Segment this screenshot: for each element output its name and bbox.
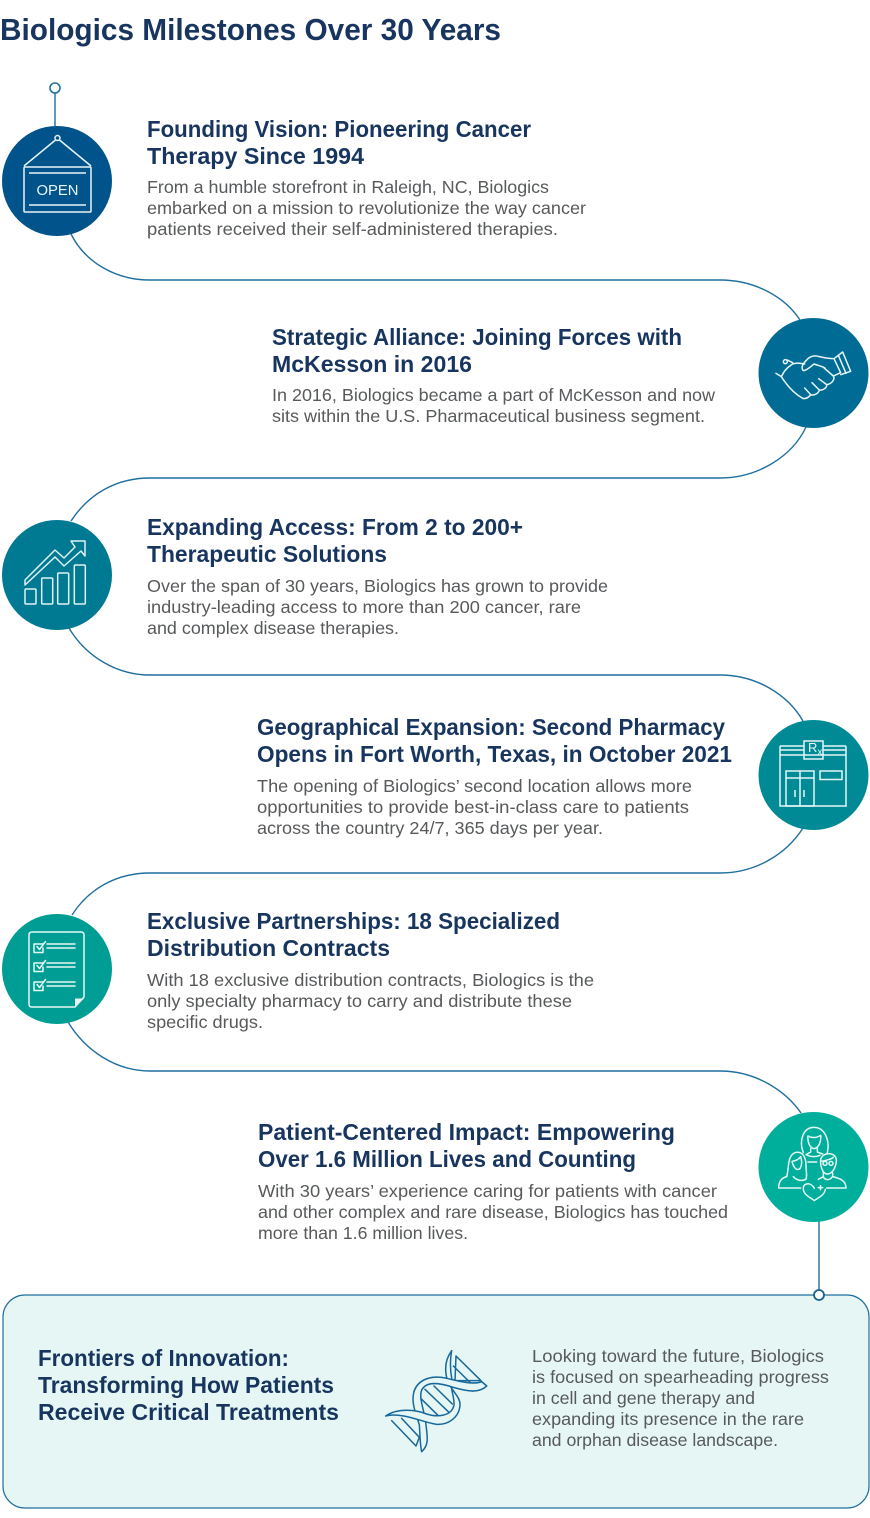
panel heading: Transforming How Patients xyxy=(38,1372,334,1398)
body text: patients received their self-administered therapies. xyxy=(147,219,558,239)
icon: pharmacy storefront: R xyxy=(808,740,817,755)
body text xyxy=(257,776,692,838)
body text: specific drugs. xyxy=(147,1012,263,1032)
body text: more than 1.6 million lives. xyxy=(258,1223,468,1243)
icon: growth chart xyxy=(2,520,112,630)
body text: across the country 24/7, 365 days per year. xyxy=(257,818,603,838)
body text: With 30 years’ experience caring for patients with cancer xyxy=(258,1181,717,1201)
heading xyxy=(147,116,531,169)
heading: Opens in Fort Worth, Texas, in October 2021 xyxy=(257,741,732,767)
heading: Therapy Since 1994 xyxy=(147,143,364,169)
body text: With 18 exclusive distribution contracts, Biologics is the xyxy=(147,970,594,990)
milestone 6: patient-centered impact xyxy=(258,1112,868,1243)
icon: handshake xyxy=(758,318,868,428)
panel heading xyxy=(38,1345,339,1425)
heading xyxy=(258,1119,675,1172)
body text: sits within the U.S. Pharmaceutical business segment. xyxy=(272,406,705,426)
heading: Distribution Contracts xyxy=(147,935,390,961)
heading xyxy=(257,714,732,767)
milestone 5: exclusive partnerships xyxy=(2,908,594,1032)
body text xyxy=(272,385,715,426)
heading: Geographical Expansion: Second Pharmacy xyxy=(257,714,725,740)
heading xyxy=(272,324,682,377)
body text: industry-leading access to more than 200 cancer, rare xyxy=(147,597,581,617)
body text: In 2016, Biologics became a part of McKesson and now xyxy=(272,385,715,405)
panel body text: Looking toward the future, Biologics xyxy=(532,1346,824,1366)
body text: The opening of Biologics’ second location allows more xyxy=(257,776,692,796)
panel: frontiers of innovation xyxy=(3,1290,869,1508)
heading: Strategic Alliance: Joining Forces with xyxy=(272,324,682,350)
body text xyxy=(147,576,608,638)
body text: opportunities to provide best-in-class care to patients xyxy=(257,797,689,817)
icon: pharmacy storefront: x xyxy=(817,747,822,758)
connector path xyxy=(50,83,819,1290)
icon: pharmacy storefront xyxy=(758,720,868,830)
body text: and complex disease therapies. xyxy=(147,618,399,638)
body text: only specialty pharmacy to carry and distribute these xyxy=(147,991,572,1011)
body text xyxy=(147,970,594,1032)
milestone 4: geographical expansion xyxy=(257,714,868,838)
heading xyxy=(147,908,560,961)
heading: Founding Vision: Pioneering Cancer xyxy=(147,116,531,142)
panel body text: expanding its presence in the rare xyxy=(532,1409,804,1429)
heading: Exclusive Partnerships: 18 Specialized xyxy=(147,908,560,934)
body text: embarked on a mission to revolutionize the way cancer xyxy=(147,198,586,218)
icon: patients with heart xyxy=(758,1112,868,1222)
heading: McKesson in 2016 xyxy=(272,351,472,377)
heading: Patient-Centered Impact: Empowering xyxy=(258,1119,675,1145)
body text: Over the span of 30 years, Biologics has grown to provide xyxy=(147,576,608,596)
panel body text: in cell and gene therapy and xyxy=(532,1388,755,1408)
panel body text: is focused on spearheading progress xyxy=(532,1367,829,1387)
body text: and other complex and rare disease, Biologics has touched xyxy=(258,1202,728,1222)
panel body text: and orphan disease landscape. xyxy=(532,1430,778,1450)
milestone 1: founding vision xyxy=(2,116,586,239)
panel body text xyxy=(532,1346,829,1450)
icon: open sign: OPEN xyxy=(36,182,78,199)
icon: checklist document xyxy=(2,914,112,1024)
panel end dot xyxy=(814,1290,824,1300)
milestone 2: strategic alliance xyxy=(272,318,868,428)
panel heading: Frontiers of Innovation: xyxy=(38,1345,289,1371)
body text: From a humble storefront in Raleigh, NC, Biologics xyxy=(147,177,549,197)
icon: dna helix xyxy=(386,1351,487,1452)
heading: Therapeutic Solutions xyxy=(147,541,387,567)
panel heading: Receive Critical Treatments xyxy=(38,1399,339,1425)
title: Biologics Milestones Over 30 Years xyxy=(0,12,501,47)
heading: Expanding Access: From 2 to 200+ xyxy=(147,514,523,540)
body text xyxy=(147,177,586,239)
icon: open sign xyxy=(2,126,112,236)
milestone 3: expanding access xyxy=(2,514,608,638)
body text xyxy=(258,1181,728,1243)
heading: Over 1.6 Million Lives and Counting xyxy=(258,1146,636,1172)
heading xyxy=(147,514,523,567)
